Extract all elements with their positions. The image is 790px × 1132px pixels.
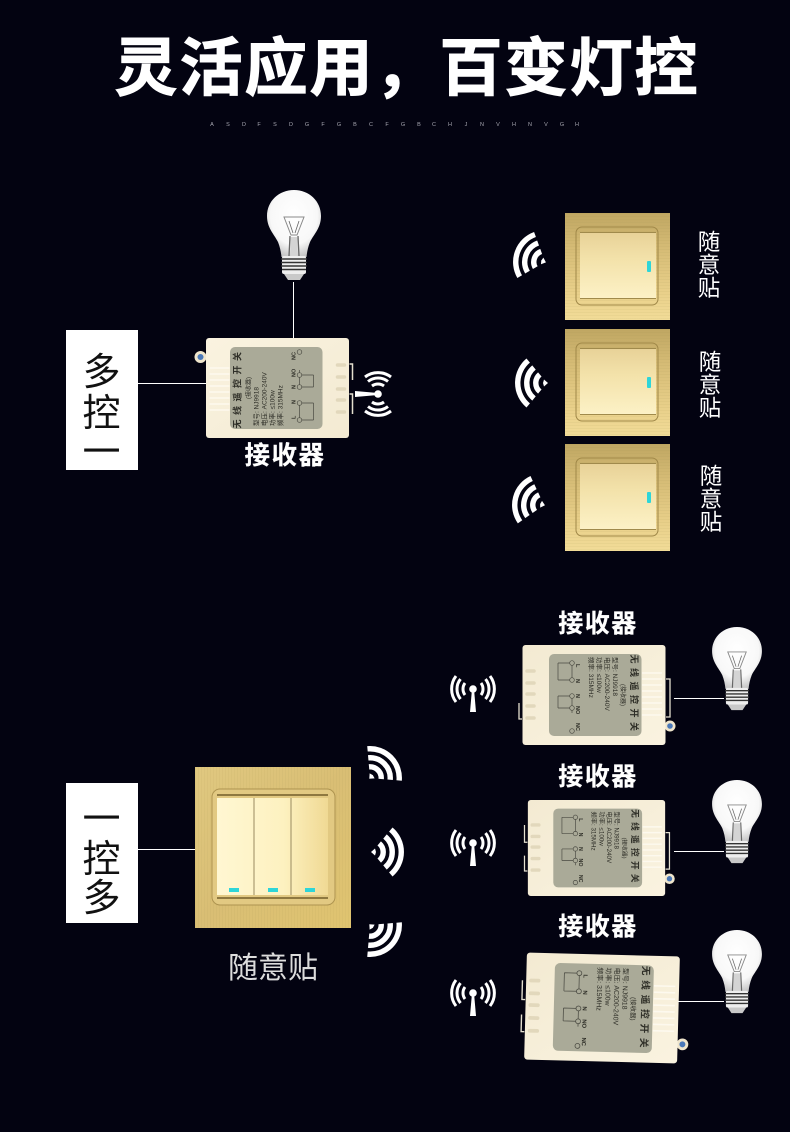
single-gang switch 2: [565, 329, 670, 436]
receiver label 3: 接收器: [558, 913, 638, 941]
receiver module 1: N: [574, 694, 580, 698]
receiver module 1: L: [574, 664, 580, 668]
receiver module 2: NC: [577, 875, 583, 883]
receiver module: NO: [292, 368, 298, 377]
single-gang switch 1: [565, 213, 670, 320]
icon: bulb 1: [712, 627, 762, 710]
receiver module 2: (接收器): [620, 837, 628, 859]
receiver module: NC: [292, 352, 298, 360]
receiver module 3: 电压: AC200-240V: [611, 968, 622, 1026]
receiver module 2: 型号: NJ9918: [613, 812, 621, 849]
receiver module: N: [292, 385, 298, 389]
label box: 多控一: 多: [82, 352, 121, 394]
receiver module: 频率: 315MHz: [276, 385, 284, 426]
receiver row 1: [452, 610, 762, 745]
receiver module 3: N: [581, 1006, 587, 1011]
label: 随意贴 1: 意: [698, 253, 720, 278]
receiver module 3: 无线遥控开关: [637, 966, 652, 1053]
label: 随意贴 3: [700, 464, 722, 535]
receiver module: 功率: ≤100w: [268, 390, 276, 426]
receiver label 1: 接收器: [558, 610, 638, 638]
icon: antenna 1: [452, 676, 494, 712]
label: 随意贴 2: 意: [699, 373, 721, 398]
icon: bulb 3: [712, 930, 762, 1013]
connector 2: [674, 850, 724, 852]
label: 随意贴 3: 意: [700, 487, 722, 512]
receiver module 3: NC: [580, 1037, 586, 1047]
receiver row 3: [452, 913, 762, 1064]
receiver module 1: NC: [574, 723, 580, 731]
label: 随意贴 1: 贴: [698, 276, 720, 301]
label box: 多控一: 控: [82, 393, 121, 435]
connector 1: [674, 698, 724, 700]
receiver module: [194, 338, 352, 438]
label: 随意贴 2: 随: [699, 350, 721, 375]
label: 随意贴: 随意贴: [228, 952, 318, 985]
receiver module 3: (接收器): [629, 997, 638, 1021]
icon: wireless signal 3: [510, 476, 551, 527]
label: 随意贴 1: 随: [698, 230, 720, 255]
receiver module 2: 电压: AC200-240V: [605, 812, 613, 864]
label: 随意贴 3: 随: [700, 464, 722, 489]
receiver module 1: 型号: NJ9918: [611, 657, 620, 696]
receiver module 3: L: [582, 974, 588, 978]
label box: 多控一: [66, 330, 138, 474]
panel: one controls many: [66, 610, 762, 1064]
label box: 一控多: 控: [82, 839, 121, 881]
label: 随意贴 2: 贴: [699, 396, 721, 421]
receiver module: 无线遥控开关: [232, 347, 242, 429]
receiver label: 接收器: [244, 442, 326, 470]
decorative letter row: ASDFSDGFGBCFGBCHJNVHNVGH: [210, 122, 579, 128]
label: 随意贴 3: 贴: [700, 510, 722, 535]
icon: wireless signal 2: [518, 361, 548, 405]
receiver module 2: [524, 800, 675, 896]
receiver module 3: [520, 952, 691, 1064]
receiver module: 电压: AC200-240V: [260, 372, 268, 426]
label box: 一控多: 多: [82, 878, 121, 920]
connector: bulb to receiver: [292, 282, 294, 339]
icon: receiver antenna signal: [355, 373, 391, 415]
receiver module 2: N: [577, 847, 583, 851]
receiver module 2: N: [577, 833, 583, 837]
receiver module 3: N: [581, 990, 587, 995]
receiver module: (接收器): [244, 377, 252, 399]
receiver label 2: 接收器: [558, 763, 638, 791]
wall switch 3 group: [510, 444, 722, 551]
receiver module: N: [292, 400, 298, 404]
receiver row 2: [452, 763, 762, 896]
single-gang switch 3: [565, 444, 670, 551]
receiver module: 型号: NJ9918: [252, 387, 260, 426]
receiver module: L: [292, 415, 298, 419]
three-gang switch: [195, 767, 351, 928]
label box: 一控多: 一: [82, 799, 121, 841]
icon: wireless signal down: [353, 908, 407, 962]
receiver module 1: 无线遥控开关: [629, 654, 640, 736]
title: 灵活应用，百变灯控: [114, 34, 700, 104]
receiver module 2: 频率: 315MHz: [590, 812, 598, 851]
receiver module 1: NO: [574, 706, 580, 715]
receiver module 2: L: [577, 818, 583, 822]
receiver module 2: NO: [577, 859, 583, 866]
receiver module 1: (接收器): [619, 684, 627, 706]
icon: wireless signal right: [371, 830, 401, 874]
panel: many controls one: [66, 190, 722, 551]
receiver module 1: N: [574, 679, 580, 683]
receiver module 3: 频率: 315MHz: [595, 967, 605, 1011]
receiver module 1: 电压: AC200-240V: [603, 657, 612, 711]
wall switch 1 group: [510, 213, 720, 320]
connector: label to switch: [138, 848, 195, 850]
wall switch 2 group: [518, 329, 721, 436]
label box: 多控一: 一: [82, 432, 121, 474]
receiver module 1: 频率: 315MHz: [587, 657, 596, 698]
receiver module 2: 无线遥控开关: [630, 809, 641, 887]
receiver module 1: [519, 645, 676, 745]
icon: wireless signal 1: [510, 231, 554, 283]
icon: light bulb: [267, 190, 321, 280]
icon: wireless signal up: [353, 741, 407, 795]
icon: antenna 2: [452, 830, 494, 866]
receiver module 3: NO: [580, 1019, 586, 1029]
receiver module 3: 型号: NJ9918: [620, 968, 630, 1010]
receiver module 2: 功率: ≤100w: [597, 812, 605, 846]
receiver module 1: 功率: ≤100w: [595, 657, 604, 693]
label: 随意贴 2: [699, 350, 721, 421]
connector 3: [678, 1000, 724, 1002]
receiver module 3: 功率: ≤100w: [603, 967, 613, 1007]
icon: antenna 3: [452, 980, 494, 1016]
label box: 一控多: [66, 783, 138, 923]
icon: bulb 2: [712, 780, 762, 863]
label: 随意贴 1: [698, 230, 720, 301]
connector: label to receiver: [138, 382, 207, 384]
